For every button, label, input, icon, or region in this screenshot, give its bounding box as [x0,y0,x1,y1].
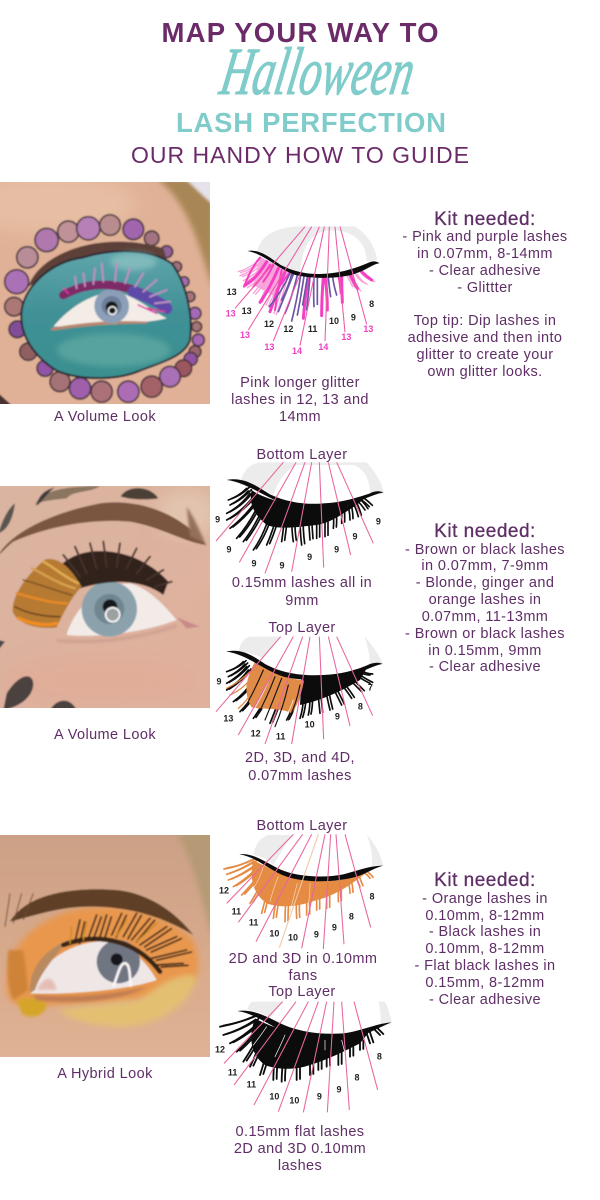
caption: top layer 2: 0.15mm flat lashes [236,1124,364,1140]
eye [30,942,157,994]
kit list: section 1: - Pink and purple lashes [402,229,568,245]
photo: hybrid eye with orange shadow [0,832,213,1062]
eye [53,292,167,327]
length labels: 10 [269,1091,279,1101]
length labels: 9 [352,531,357,541]
black lashes [300,668,367,705]
length labels: 12 [251,729,261,739]
kit list: section 2: - Brown or black lashes [405,626,565,642]
kit list: section 2: 0.07mm, 11-13mm [422,609,548,625]
kit list: section 2: in 0.15mm, 9mm [428,643,542,659]
length labels [226,287,374,356]
caption: volume look 1: A Volume Look [54,409,156,425]
caption: pink lash map [231,375,369,425]
purple lashes [269,273,337,321]
map lines [227,834,371,949]
length labels: 13 [264,342,274,352]
length labels: 8 [358,702,363,712]
black lashes [251,1018,373,1069]
leopard spots [35,486,100,505]
length labels: 9 [332,923,337,933]
length labels: 13 [341,332,351,342]
length labels: 9 [336,1084,341,1094]
orange lashes [246,662,304,713]
photo: glitter teal eye look [0,173,213,410]
length labels [216,676,373,741]
kit list: section 1: glitter to create your [417,347,553,363]
length labels: 8 [354,1073,359,1083]
kit list: section 1: adhesive and then into [408,330,562,346]
lash map: pink glitter [226,226,379,356]
black lashes [251,490,367,528]
kit list: section 3: - Flat black lashes in [415,958,555,974]
length labels: 11 [228,1067,237,1077]
lash band [237,1011,392,1040]
length labels: 13 [240,330,250,340]
map lines [235,227,367,346]
orange lashes [13,559,82,628]
kit list: section 2: in 0.07mm, 7-9mm [421,558,549,574]
kit list: section 3: Kit needed: [434,870,536,891]
length labels: 11 [308,324,317,334]
kit list: section 2 [405,521,565,675]
caption: pink lash map: lashes in 12, 13 and [231,392,369,408]
length labels: 9 [334,544,339,554]
brow [28,242,170,287]
length labels: 10 [305,720,315,730]
length labels: 8 [369,891,374,901]
kit list: section 3: 0.15mm, 8-12mm [425,975,545,991]
kit list: section 1 [402,209,568,380]
script title: Halloween: Halloween [215,35,420,109]
caption: top layer 2: 2D and 3D 0.10mm [234,1141,366,1157]
eyebrow [10,889,193,935]
kit list: section 3: 0.10mm, 8-12mm [425,908,545,924]
eye [67,583,177,636]
length labels: 14 [292,346,302,356]
dark lashes [63,913,191,972]
heading: top layer: Top Layer [268,620,336,636]
kit list: section 3: - Black lashes in [429,924,541,940]
kit list: section 2: Kit needed: [434,521,536,542]
purple and pink lashes [63,263,170,313]
length labels: 9 [351,313,356,323]
caption: bottom layer 2: fans [288,968,318,984]
caption: bottom layer: 9mm [285,593,319,609]
lash band [239,854,383,881]
length labels: 10 [288,933,298,943]
caption: top layer: 0.07mm lashes [248,768,352,784]
caption: top layer: 2D, 3D, and 4D, [245,750,355,766]
kit list: section 3: 0.10mm, 8-12mm [425,941,545,957]
lash band [226,651,383,680]
kit list: section 1: Top tip: Dip lashes in [414,313,556,329]
length labels: 9 [279,560,284,570]
eyebrow [0,502,207,555]
heading: top layer 2: Top Layer [268,984,336,1000]
length labels: 10 [289,1095,299,1105]
caption: pink lash map: 14mm [279,409,321,425]
lash map: top layer orange and black [216,637,383,744]
glitter border gems [5,215,204,402]
length labels: 13 [223,714,233,724]
caption: top layer 2: lashes [278,1158,322,1174]
kit list: section 1: in 0.07mm, 8-14mm [417,246,553,262]
length labels: 14 [318,342,328,352]
length labels: 12 [215,1045,225,1055]
length labels: 12 [264,319,274,329]
caption: top layer 2 [234,1124,366,1174]
length labels: 9 [335,711,340,721]
length labels [215,1045,382,1105]
caption: bottom layer [232,575,372,609]
kit list: section 3: - Orange lashes in [422,891,548,907]
length labels: 12 [219,886,229,896]
caption: volume look 2: A Volume Look [54,727,156,743]
caption: bottom layer 2 [229,951,377,984]
title line: lash perfection: LASH PERFECTION [176,107,446,138]
length labels [219,886,374,943]
length labels: 9 [314,929,319,939]
map lines [216,462,373,573]
kit list: section 1: own glitter looks. [427,364,543,380]
caption: top layer [245,750,355,784]
lash map: bottom layer orange [219,834,383,949]
length labels: 9 [216,676,221,686]
length labels: 13 [363,324,373,334]
title line: map your way to: MAP YOUR WAY TO [162,17,438,48]
lash band [227,479,383,508]
length labels: 12 [283,324,293,334]
teal eyeshadow [21,251,191,378]
length labels: 11 [276,731,285,741]
caption: hybrid look: A Hybrid Look [57,1066,153,1082]
kit list: section 1: - Clear adhesive [429,263,541,279]
length labels [215,514,381,570]
length labels: 10 [329,316,339,326]
lash band [247,251,379,278]
photo: volume eye with orange lashes [0,483,217,713]
caption: pink lash map: Pink longer glitter [240,375,360,391]
caption: bottom layer 2: 2D and 3D in 0.10mm [229,951,377,967]
orange lashes [252,860,370,906]
length labels: 9 [307,552,312,562]
length labels: 11 [249,917,258,927]
kit list: section 2: - Brown or black lashes [405,542,565,558]
kit list: section 2: - Blonde, ginger and [416,575,554,591]
length labels: 7 [368,683,373,693]
length labels: 9 [215,514,220,524]
length labels: 9 [226,544,231,554]
dark lashes [58,551,168,595]
map lines [216,637,373,744]
kit list: section 3: - Clear adhesive [429,992,541,1008]
map lines [224,1002,378,1112]
length labels: 8 [377,1051,382,1061]
length labels: 8 [369,299,374,309]
kit list: section 1: - Glittter [457,280,513,296]
heading: bottom layer: Bottom Layer [256,447,348,463]
length labels: 11 [232,906,241,916]
length labels: 9 [376,516,381,526]
lash map: bottom layer black [215,462,384,573]
kit list: section 2: orange lashes in [429,592,541,608]
pink lashes [238,258,372,314]
heading: bottom layer 2: Bottom Layer [256,818,348,834]
length labels: 10 [269,928,279,938]
length labels: 13 [226,309,236,319]
subtitle: OUR HANDY HOW TO GUIDE [131,142,469,168]
kit list: section 1: Kit needed: [434,209,536,230]
length labels: 8 [349,912,354,922]
caption: bottom layer: 0.15mm lashes all in [232,575,372,591]
title [131,17,469,168]
kit list: section 2: - Clear adhesive [429,659,541,675]
orange and yellow shadow [7,907,199,1007]
lash map: top layer black [215,1002,392,1112]
length labels: 9 [317,1092,322,1102]
length labels: 11 [247,1079,256,1089]
length labels: 13 [242,306,252,316]
kit list: section 3 [415,870,555,1008]
length labels: 9 [251,558,256,568]
length labels: 13 [227,287,237,297]
